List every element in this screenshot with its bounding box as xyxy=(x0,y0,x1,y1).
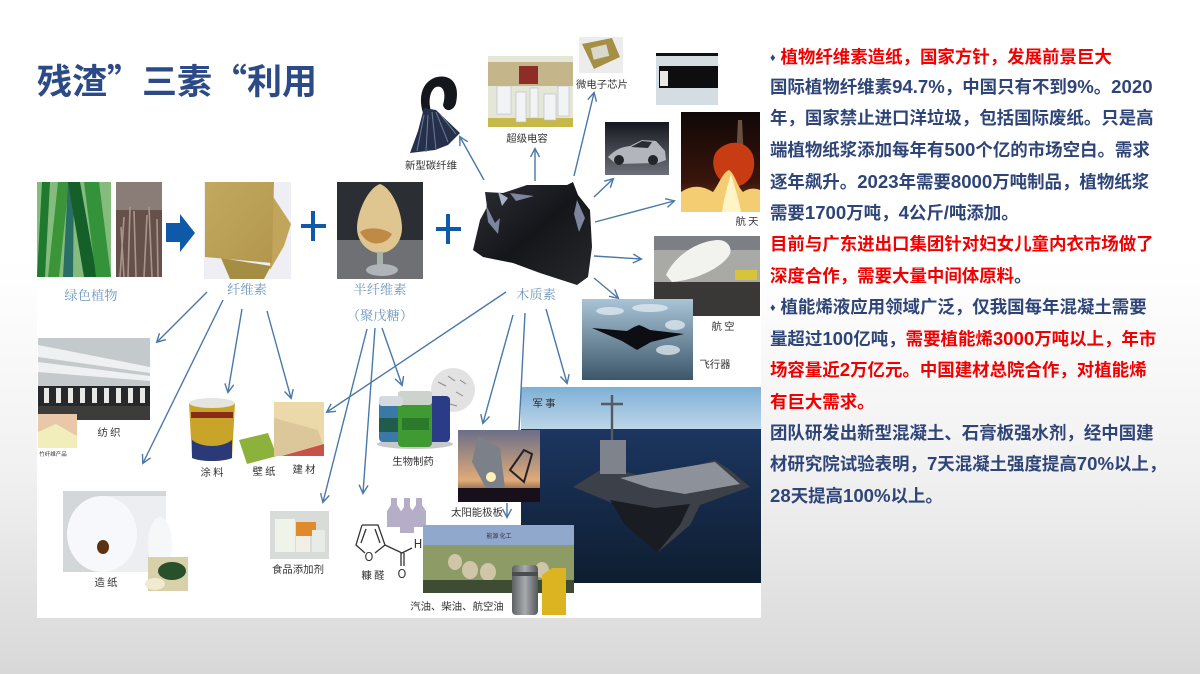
arrow: plants to cellulose xyxy=(166,214,195,252)
chemical structure: furfural xyxy=(356,525,422,582)
label: military: 军 事 xyxy=(532,395,556,410)
chemical structure: furfural: H xyxy=(414,535,422,552)
label: food additive: 食品添加剂 xyxy=(272,561,324,576)
image: paper roll xyxy=(63,491,172,573)
image: bamboo fibre products xyxy=(38,414,77,448)
chemical structure: furfural: O xyxy=(398,565,407,582)
image: black sheet xyxy=(656,53,718,105)
label: supercapacitor: 超级电容 xyxy=(506,130,548,145)
image: reagent bottles xyxy=(387,498,426,533)
image: pharma bottles xyxy=(377,368,475,449)
text block: paper line 1: 国际植物纤维素94.7%，中国只有不到9%。2020 xyxy=(770,76,1153,97)
image: supercapacitors xyxy=(488,56,573,127)
text block: research line 2: 材研究院试验表明，7天混凝土强度提高70%以上， xyxy=(770,453,1166,474)
image: food inset xyxy=(145,557,188,591)
label: textile: 纺 织 xyxy=(97,424,121,439)
text block: paper line 5: 需要1700万吨，4公斤/吨添加。 xyxy=(770,202,1019,223)
text block: red cooperation line 2: 深度合作，需要大量中间体原料。 xyxy=(770,266,1032,286)
text block: first bullet heading: ♦ 植物纤维素造纸，国家方针，发展前景巨大 xyxy=(770,47,1112,67)
image: oil drum xyxy=(512,565,538,615)
label: energy chemical: 能源 化工 xyxy=(486,531,512,540)
image: oil canister xyxy=(542,568,566,615)
icon: plus xyxy=(301,211,326,241)
label: green plants: 绿色植物 xyxy=(64,285,118,304)
label: aerospace: 航 天 xyxy=(735,213,759,228)
image: stealth aircraft xyxy=(582,299,693,380)
image: hemicellulose flask xyxy=(337,182,423,279)
text block: red line 3: 场容量近2万亿元。中国建材总院合作，对植能烯 xyxy=(770,359,1147,380)
label: papermaking: 造 纸 xyxy=(94,574,118,589)
label: biopharma: 生物制药 xyxy=(392,453,434,468)
image: food additive xyxy=(270,511,329,559)
image: lignin lump xyxy=(473,182,592,285)
label: furfural: 糠 醛 xyxy=(361,567,385,582)
image: microchip xyxy=(579,37,623,73)
text block: second bullet: ♦ 植能烯液应用领域广泛，仅我国每年混凝土需要 xyxy=(770,297,1147,317)
image: carbon fibre xyxy=(410,77,460,153)
image: rocket launch xyxy=(681,112,760,212)
image: cellulose sheets xyxy=(204,182,291,279)
label: paint: 涂 料 xyxy=(200,464,224,479)
text block: paper line 2: 年，国家禁止进口洋垃圾，包括国际废纸。只是高 xyxy=(770,108,1154,128)
image: reeds xyxy=(116,182,162,277)
text block: red line 4: 有巨大需求。 xyxy=(770,392,875,412)
text block: red cooperation line 1: 目前与广东进出口集团针对妇女儿童内衣市场做了 xyxy=(770,234,1154,254)
image: airship xyxy=(654,236,760,316)
label: cellulose: 纤维素 xyxy=(227,279,267,298)
label: lignin: 木质素 xyxy=(516,284,556,303)
label: fuels: 汽油、柴油、航空油 xyxy=(410,598,504,613)
text block: paper line 3: 端植物纸浆添加每年有500个亿的市场空白。需求 xyxy=(770,139,1150,160)
text block: research line 1: 团队研发出新型混凝土、石膏板强水剂，经中国建 xyxy=(770,423,1154,443)
label: hemicellulose: 半纤维素 xyxy=(353,279,407,298)
label: aircraft: 飞行器 xyxy=(699,356,731,371)
text block: paper line 4: 逐年飙升。2023年需要8000万吨制品，植物纸浆 xyxy=(770,171,1149,192)
label: solar panel: 太阳能极板 xyxy=(451,504,504,519)
title: 残渣”三素“利用 xyxy=(37,54,317,105)
label: bamboo fibre products: 竹纤维产品 xyxy=(39,450,67,458)
text block: concrete line 2: 量超过100亿吨，需要植能烯3000万吨以上，年市 xyxy=(770,328,1156,349)
label: aviation: 航 空 xyxy=(711,318,735,333)
image: carrier at sea xyxy=(521,387,761,583)
chemical structure: furfural: O xyxy=(365,548,374,565)
image: solar dish xyxy=(458,430,540,502)
image: bamboo xyxy=(37,182,111,277)
text block: research line 3: 28天提高100%以上。 xyxy=(770,485,943,506)
icon: plus xyxy=(436,214,461,244)
label: building materials: 建 材 xyxy=(292,461,316,476)
image: building materials xyxy=(274,402,324,456)
image: textile machinery xyxy=(38,338,150,420)
label: microchip: 微电子芯片 xyxy=(576,76,628,91)
panel: diagram background xyxy=(37,30,761,618)
image: wallpaper xyxy=(239,433,277,464)
image: refinery xyxy=(423,525,574,593)
label: polypentose: （聚戊糖） xyxy=(347,305,413,324)
label: wallpaper: 壁 纸 xyxy=(252,463,276,478)
arrows: flow connections xyxy=(143,93,674,517)
image: paint bucket xyxy=(189,398,235,461)
image: sports car xyxy=(605,122,669,175)
label: carbon fibre: 新型碳纤维 xyxy=(405,157,457,172)
